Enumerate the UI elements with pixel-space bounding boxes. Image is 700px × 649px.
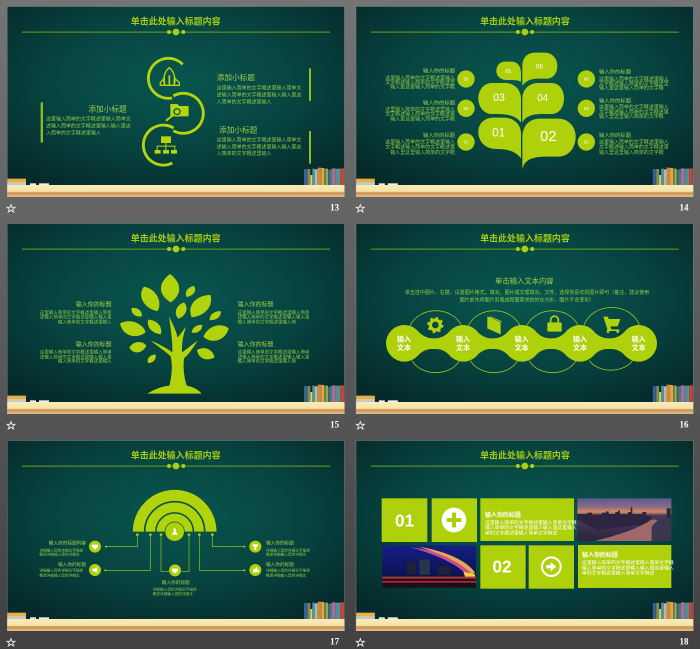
right labels: 文字概述输入简单的文字概述里	[599, 80, 669, 87]
chain labels: 输入	[632, 334, 646, 343]
star icon	[356, 422, 364, 429]
number circles: 05	[464, 77, 469, 82]
chain labels: 文本	[573, 343, 587, 352]
tile: text 1: 这里输入简单的文字概述里输入简单文字概	[485, 519, 577, 526]
slide background	[7, 223, 345, 414]
tree illustration	[120, 274, 229, 394]
left labels: 输入里这里输入简单的文字概	[390, 83, 455, 90]
right labels: 述输入简单的文字概述里输入输入里	[238, 314, 310, 321]
slide 17: rainbow arch diagram	[7, 440, 345, 646]
text block: right bottom: 入简单的文字概述里输入	[217, 150, 272, 157]
icon: lock	[547, 316, 562, 332]
label: left top	[39, 539, 86, 557]
slide 13: three ring list	[7, 6, 345, 212]
tile: 01	[382, 498, 427, 542]
text block: left: 入简单的文字概述里输入	[46, 130, 101, 137]
star icon	[7, 422, 15, 429]
page number: 15	[330, 419, 340, 429]
text block: left	[46, 103, 131, 137]
chain shape	[386, 325, 657, 362]
tile: text 1	[480, 498, 577, 541]
intro text: 单击选中图片，右键，设置图片格式，填充，图片或文理填充，文件，选择你喜欢的图片即可（备注，建议使用	[405, 289, 649, 296]
left labels: 输入你的标题	[423, 131, 456, 139]
thin arcs	[410, 307, 639, 373]
text block: right top: 添加小标题	[217, 72, 255, 82]
star icon	[356, 205, 364, 212]
slide background	[7, 6, 345, 197]
icon: gear	[428, 318, 443, 332]
number circles: 06	[584, 77, 589, 82]
chain labels	[397, 334, 646, 352]
number circles: 01	[464, 140, 469, 145]
right labels: 输入你的标题	[599, 131, 632, 139]
icon: book	[487, 316, 502, 334]
number circles	[457, 70, 595, 151]
icon: org chart	[155, 136, 177, 154]
chain labels: 输入	[515, 334, 529, 343]
right labels: 输入里这里输入简单的文字概	[599, 149, 664, 156]
center circle icon	[165, 522, 184, 541]
label: center	[153, 579, 197, 596]
text block: left: 这里输入简单的文字概述里输入简单文	[46, 116, 131, 123]
label: left bottom	[39, 561, 86, 577]
number circles: 03	[464, 106, 469, 111]
accent bars	[41, 68, 311, 164]
right labels: 这里输入简单的文字概述里输入	[599, 104, 669, 111]
icon: cart	[603, 317, 620, 333]
label: right top: 输入你的标题	[266, 539, 294, 546]
text block: right top: 述输入简单的文字概述里输入输入里这	[217, 92, 301, 99]
ring diagram	[143, 58, 203, 165]
number circles: 04	[584, 106, 589, 111]
number circles: 02	[584, 140, 589, 145]
leaf numbers: 06	[536, 63, 543, 70]
title: 单击此处输入标题内容	[131, 233, 221, 244]
chain labels: 文本	[632, 343, 646, 352]
title: 单击此处输入标题内容	[480, 16, 570, 27]
label: right bottom	[266, 561, 310, 577]
left labels: 输入你的标题	[423, 99, 456, 107]
tile: 02	[480, 545, 526, 589]
chain labels: 文本	[456, 343, 470, 352]
left labels: 述输入简单的文字概述里输入输入里	[40, 353, 112, 360]
page number: 13	[330, 202, 340, 212]
right labels: 输入里这里输入简单的文字概	[599, 85, 664, 92]
chain labels: 输入	[397, 334, 411, 343]
leaf numbers: 01	[492, 125, 506, 139]
label: right top: 概述详细输入您的详细文	[266, 552, 307, 557]
leaf shapes	[478, 53, 576, 170]
intro text: 图片前先将图片剪裁成和图需求的的长方形，图片不会变形）	[460, 297, 594, 304]
right labels: 述输入简单的文字概述里输入输入里	[238, 353, 310, 360]
right labels: 文字概述输入简单的文字概述里	[599, 108, 669, 115]
leaf numbers: 05	[505, 69, 511, 75]
page number: 17	[330, 636, 340, 646]
left labels: 文字概述输入简单的文字概述里	[385, 79, 455, 86]
slide background	[356, 440, 693, 631]
label: left top: 详细输入您的详细文字描述	[39, 547, 84, 552]
star icon	[7, 639, 15, 646]
tile: arrow icon	[529, 545, 574, 589]
left labels: 输入里这里输入简单的文字概	[390, 115, 455, 122]
right labels: 输入你的标题	[599, 68, 632, 76]
label: center: 详细输入您的详细文字描述	[153, 587, 197, 592]
right labels: 输入你的标题	[599, 96, 632, 104]
left labels: 述输入简单的文字概述里输入输入里	[40, 314, 112, 321]
tile: text 1: 输入你的标题	[485, 511, 521, 519]
label: right top: 详细输入您的详细文字描述	[266, 547, 310, 552]
tile: 01: 01	[395, 511, 415, 531]
chain labels: 输入	[573, 334, 587, 343]
tile: text 2: 输入你的标题	[582, 551, 618, 559]
right labels: 这里输入简单的文字概述里输入	[599, 76, 669, 83]
title: 单击此处输入标题内容	[131, 16, 221, 27]
page number: 18	[680, 636, 689, 646]
tile: plus icon	[432, 498, 477, 542]
right labels: 这里输入简单的文字概述里输入简单	[238, 349, 310, 356]
page number: 14	[680, 202, 689, 212]
right labels: 输入简单的文字概述里输入简	[238, 318, 296, 325]
label: right bottom: 输入你的标题	[266, 561, 294, 568]
label: right bottom: 详细输入您的详细文字描述	[266, 568, 310, 573]
left labels: 文字概述输入简单的文字概述里	[385, 144, 455, 151]
left labels: 这里输入简单的文字概述里输入	[385, 74, 455, 81]
tile: text 2: 输入简单的文字概述里输入输入里这里输入	[582, 564, 674, 571]
leaf numbers: 04	[537, 93, 549, 104]
left labels	[385, 66, 456, 156]
leaf numbers: 03	[493, 92, 505, 104]
leaf numbers	[492, 63, 556, 145]
leaf numbers: 02	[540, 129, 556, 145]
title: 单击此处输入标题内容	[131, 450, 221, 461]
right labels: 输入你的标题	[238, 341, 274, 349]
page number: 16	[680, 419, 689, 429]
left labels: 输入你的标题	[76, 341, 112, 349]
right labels	[238, 301, 310, 365]
label: center: 概述详细输入您的详细文	[153, 591, 193, 596]
left labels: 输入你的标题	[76, 301, 112, 309]
photo: city at sunset	[577, 498, 671, 541]
tile: text 1: 输入简单的文字概述里输入输入里这里输入	[485, 524, 577, 531]
left labels: 这里输入简单的文字概述里输入简单	[40, 309, 112, 316]
node icons	[89, 541, 261, 576]
left labels: 输入简单的文字概述里输入	[58, 318, 112, 325]
slide background	[7, 440, 345, 631]
slide 14: leaf diagram	[356, 6, 693, 212]
text block: right top: 入简单的文字概述里输入	[217, 99, 272, 106]
left labels: 这里输入简单的文字概述里输入简单	[40, 349, 112, 356]
label: left bottom: 输入你的标题	[58, 561, 86, 568]
intro text	[405, 276, 649, 304]
text block: right bottom: 述输入简单的文字概述里输入输入里这	[217, 143, 301, 150]
text block: right top: 这里输入简单的文字概述里输入简单文	[217, 85, 301, 92]
right labels: 输入你的标题	[238, 301, 274, 309]
right labels: 输入简单的文字概述里输入简	[238, 358, 296, 365]
text block: right bottom: 添加小标题	[219, 125, 258, 135]
left labels: 输入简单的文字概述里输入	[58, 358, 112, 365]
label: left top: 输入你的标题内容	[49, 539, 86, 546]
label: left bottom: 概述详细输入您的详细文	[39, 572, 80, 577]
connector lines	[104, 533, 245, 571]
text block: right bottom	[217, 125, 301, 157]
label: left top: 概述详细输入您的详细文	[39, 552, 80, 557]
title: 单击此处输入标题内容	[480, 233, 570, 244]
slide 15: tree diagram	[7, 223, 345, 429]
text block: right bottom: 这里输入简单的文字概述里输入简单文	[217, 136, 301, 143]
label: right top	[266, 539, 310, 557]
chain labels: 文本	[515, 343, 529, 352]
label: right bottom: 概述详细输入您的详细文	[266, 572, 307, 577]
star icon	[356, 639, 364, 646]
left labels: 这里输入简单的文字概述里输入	[385, 106, 455, 113]
text block: left: 添加小标题	[88, 103, 127, 113]
intro text: 单击输入文本内容	[495, 276, 554, 285]
tile: 02: 02	[492, 557, 512, 577]
right labels	[599, 68, 669, 156]
tile: text 1: 单的文字概述里输入简单文字概述	[485, 529, 558, 536]
left labels: 输入你的标题	[423, 66, 456, 74]
right labels: 这里输入简单的文字概述里输入	[599, 139, 669, 146]
slide 18: tile grid	[356, 440, 693, 646]
right labels: 文字概述输入简单的文字概述里	[599, 144, 669, 151]
left labels: 这里输入简单的文字概述里输入	[385, 139, 455, 146]
left labels: 输入里这里输入简单的文字概	[390, 149, 455, 156]
chain labels: 文本	[397, 343, 411, 352]
chain labels: 输入	[456, 334, 470, 343]
star icon	[7, 205, 15, 212]
label: left bottom: 详细输入您的详细文字描述	[39, 568, 84, 573]
icon: folder with magnifier	[166, 104, 189, 121]
icon: rocket	[160, 68, 179, 85]
text block: right top	[217, 72, 301, 106]
tile: text 2: 单的文字概述里输入简单文字概述	[582, 569, 655, 576]
slide background	[356, 223, 693, 414]
tile: text 2: 这里输入简单的文字概述里输入简单文字概	[582, 559, 674, 566]
arch bands	[138, 495, 211, 532]
text block: left: 述输入简单的文字概述里输入输入里这	[46, 123, 131, 130]
right labels: 输入里这里输入简单的文字概	[599, 113, 664, 120]
tile: text 2	[578, 545, 674, 588]
label: center: 输入你的标题	[162, 579, 190, 586]
left labels	[40, 301, 112, 365]
left labels: 文字概述输入简单的文字概述里	[385, 111, 455, 118]
slide 16: linked chain diagram	[356, 223, 693, 429]
title: 单击此处输入标题内容	[480, 450, 570, 461]
slide background	[356, 6, 693, 197]
photo: night light trails	[382, 545, 476, 588]
right labels: 这里输入简单的文字概述里输入简单	[238, 309, 310, 316]
